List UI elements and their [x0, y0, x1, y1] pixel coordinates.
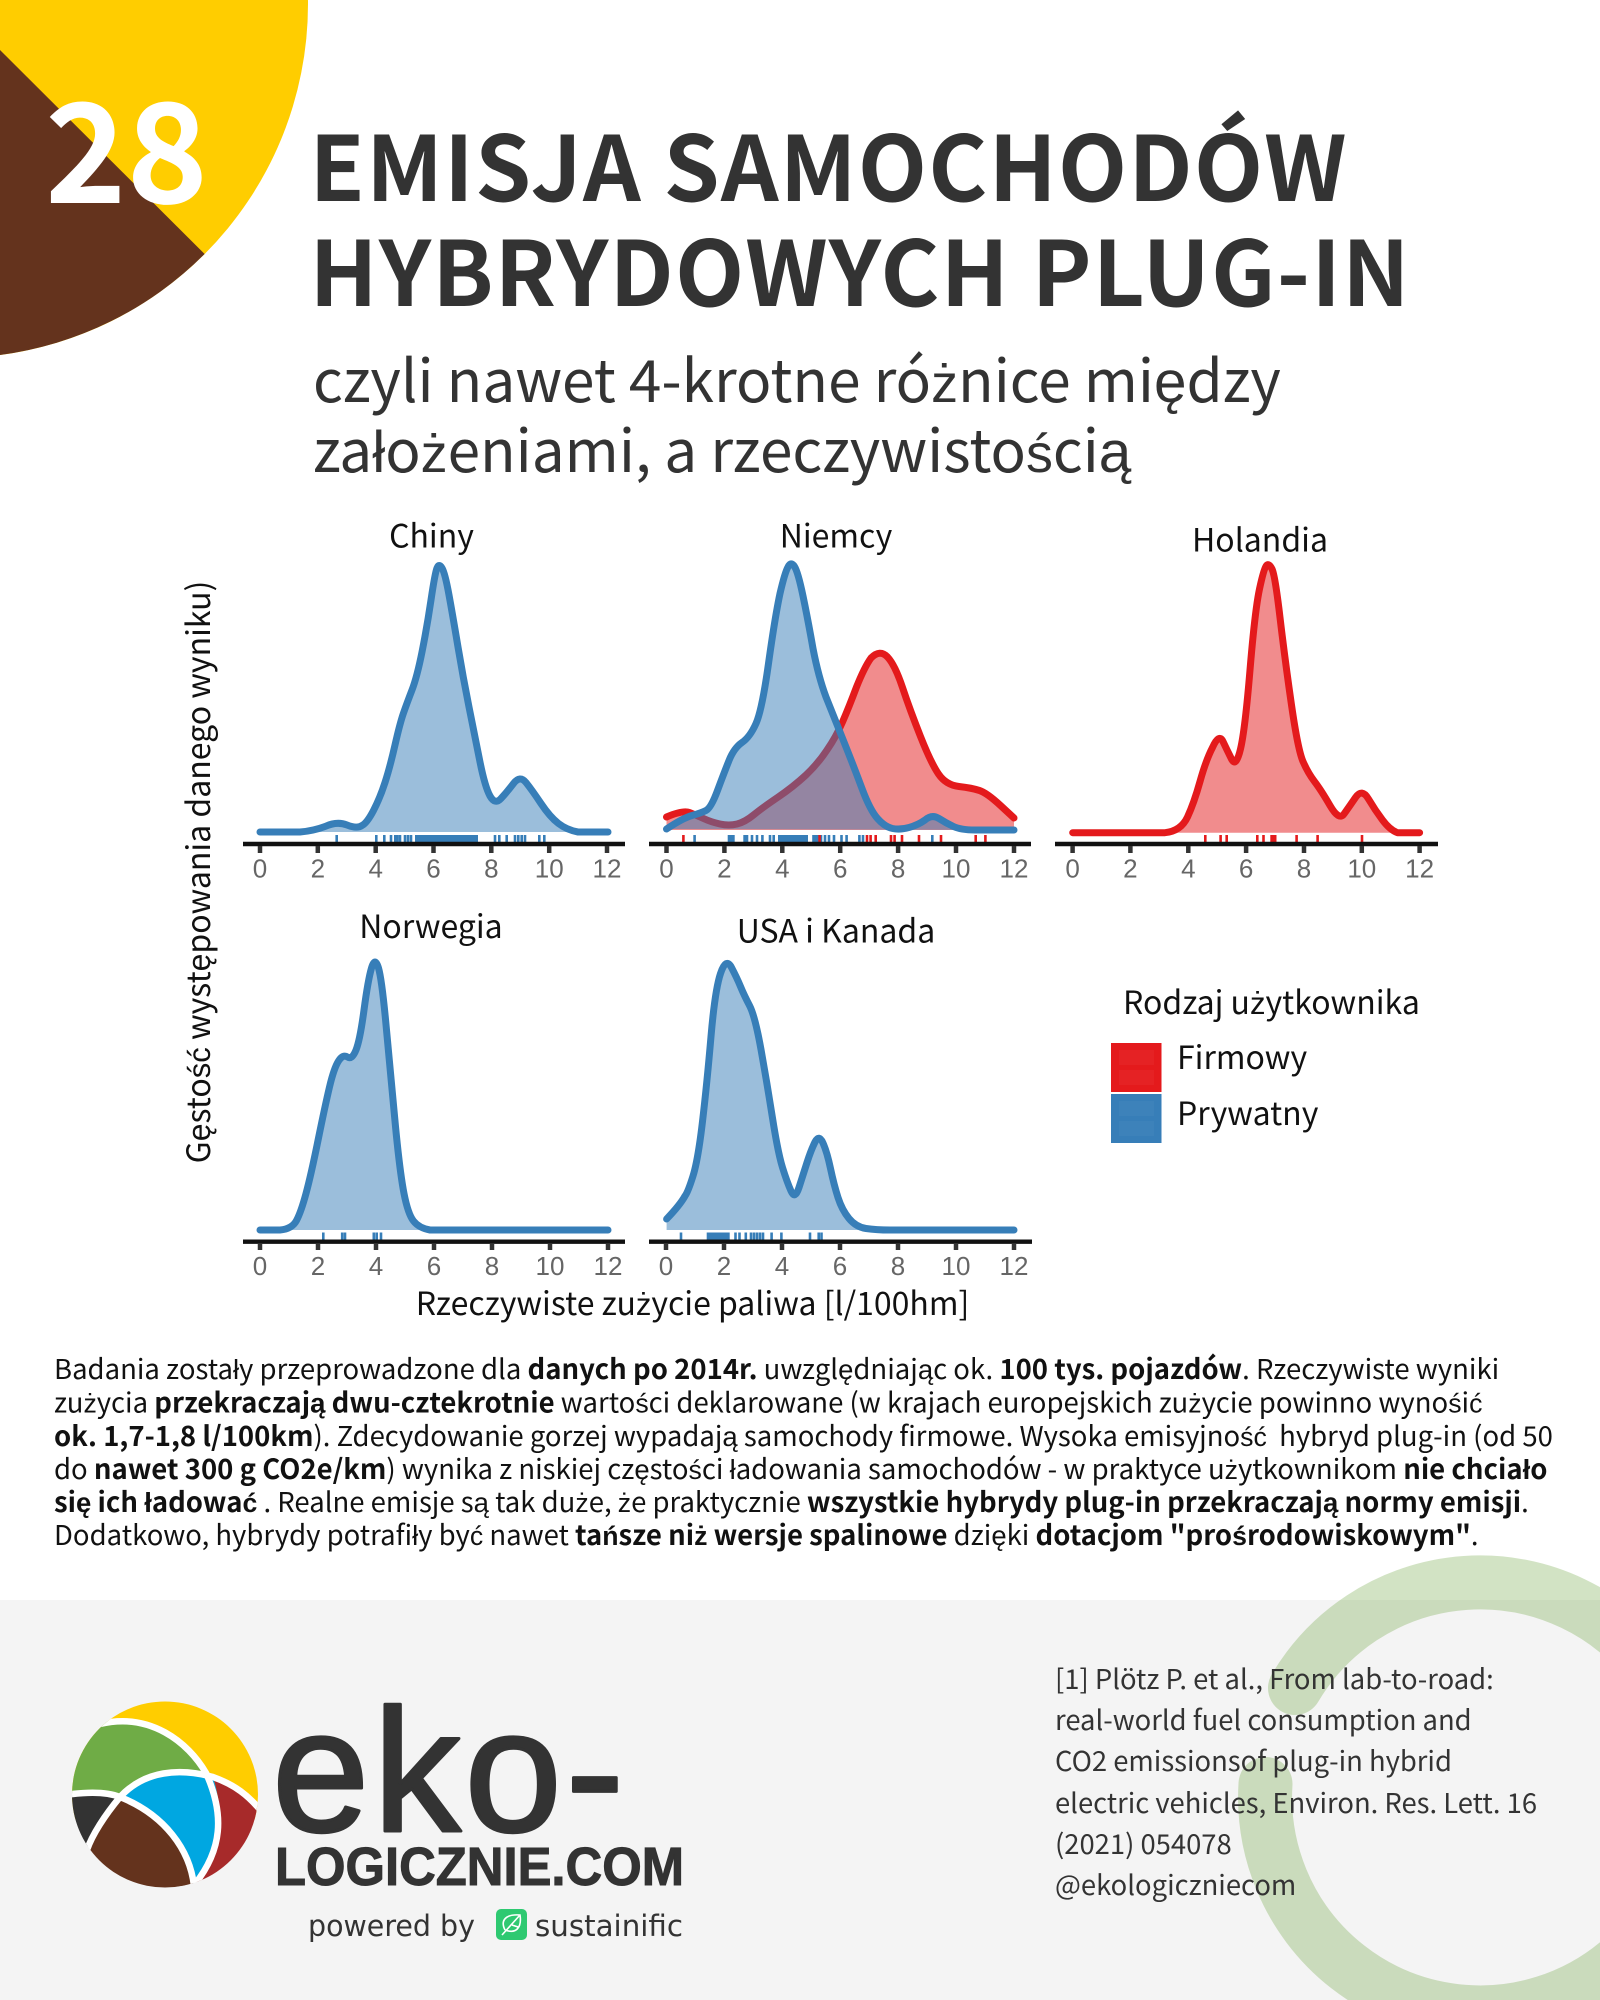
panel: Chiny: [243, 512, 625, 884]
x axis: 4: [775, 854, 790, 884]
x axis: 4: [369, 1251, 383, 1281]
legend swatch: firmowy: [1111, 1043, 1162, 1092]
citation: electric vehicles, Environ. Res. Lett. 16: [1055, 1781, 1537, 1821]
rug: [1205, 835, 1362, 843]
x axis: [649, 1242, 1032, 1281]
description text block: ok. 1,7-1,8 l/100km). Zdecydowanie gorzej wypadają samochody firmowe. Wysoka emisyjność hybryd plug-in (od 50: [54, 1414, 1553, 1454]
x axis: 12: [1000, 854, 1028, 884]
x axis: 4: [368, 854, 383, 884]
panel: USA i Kanada: [649, 906, 1032, 1281]
footer panel: [0, 1600, 1600, 2000]
heading: Niemcy: [780, 512, 893, 558]
panel: Norwegia: [243, 902, 625, 1281]
citation: (2021) 054078: [1055, 1822, 1232, 1862]
x axis: 6: [1239, 854, 1253, 884]
heading: Norwegia: [359, 902, 503, 948]
x axis: 6: [833, 1251, 847, 1281]
x axis: 0: [1065, 854, 1080, 884]
panel: Niemcy: [649, 512, 1031, 884]
density: prywatny: [667, 963, 1014, 1230]
density: prywatny: [260, 566, 608, 832]
citation: real-world fuel consumption and: [1055, 1698, 1472, 1738]
x axis: 10: [535, 854, 564, 884]
rug: [337, 835, 544, 843]
description text block: Badania zostały przeprowadzone dla danych po 2014r. uwzględniając ok. 100 tys. pojazdów. Rzeczywiste wyniki: [54, 1347, 1499, 1387]
x axis: [243, 844, 625, 884]
rug: [681, 1232, 822, 1240]
subtitle: założeniami, a rzeczywistością: [313, 404, 1132, 489]
description text block: zużycia przekraczają dwu-cztekrotnie wartości deklarowane (w krajach europejskich zużycie powinno wynośić: [54, 1380, 1482, 1420]
rug: [323, 1232, 381, 1240]
x axis: 6: [833, 854, 847, 884]
title: [310, 97, 1410, 332]
legend swatch: prywatny: [1111, 1094, 1162, 1143]
x axis: 4: [1181, 854, 1196, 884]
x axis: 2: [311, 854, 325, 884]
x axis: 2: [717, 1251, 731, 1281]
x axis: 10: [1347, 854, 1376, 884]
density: prywatny: [666, 564, 1014, 830]
subtitle: czyli nawet 4-krotne różnice między: [313, 334, 1281, 419]
x axis: 0: [659, 854, 674, 884]
description text block: [54, 1347, 1553, 1553]
legend label: prywatny: Prywatny: [1177, 1089, 1319, 1135]
x axis: 12: [593, 854, 621, 884]
density: prywatny: [260, 962, 608, 1230]
citation: @ekologiczniecom: [1055, 1863, 1296, 1903]
x axis: 4: [775, 1251, 789, 1281]
rug: [683, 835, 985, 843]
powered by sustainific: [308, 1909, 683, 1943]
x axis: 2: [311, 1251, 325, 1281]
x axis: 12: [1000, 1251, 1028, 1281]
x axis: 8: [485, 1251, 499, 1281]
issue number: 28: [45, 43, 208, 243]
x axis: 12: [594, 1251, 622, 1281]
description text block: się ich ładować . Realne emisje są tak duże, że praktycznie wszystkie hybrydy plug-in przekraczają normy emisji.: [54, 1480, 1529, 1520]
legend: [1111, 978, 1420, 1143]
density: firmowy: [1073, 565, 1420, 833]
x axis: 12: [1405, 854, 1434, 884]
logo wordmark: eko-: [272, 1674, 624, 1869]
panel: Holandia: [1055, 516, 1438, 884]
heading: Holandia: [1192, 516, 1328, 562]
title: HYBRYDOWYCH PLUG-IN: [310, 202, 1410, 332]
x axis: 8: [484, 854, 499, 884]
powered by sustainific: sustainific: [535, 1909, 683, 1943]
x axis: 0: [659, 1251, 673, 1281]
x axis: 10: [536, 1251, 564, 1281]
x axis: [649, 844, 1031, 884]
decorative ring: [1265, 1582, 1600, 2000]
x axis: 10: [942, 854, 970, 884]
icon: eko-logicznie globe logo: [72, 1702, 258, 1888]
x axis: 6: [427, 1251, 441, 1281]
logo wordmark: LOGICZNIE.COM: [275, 1837, 684, 1897]
legend label: firmowy: Firmowy: [1177, 1033, 1307, 1079]
description text block: do nawet 300 g CO2e/km) wynika z niskiej częstości ładowania samochodów - w praktyce użytkownikom nie chciało: [54, 1447, 1547, 1487]
icon: sustainific leaf: [496, 1909, 527, 1940]
title: EMISJA SAMOCHODÓW: [310, 97, 1346, 227]
legend title: Rodzaj użytkownika: [1123, 978, 1420, 1024]
x axis: 0: [253, 854, 267, 884]
x axis: 8: [1297, 854, 1311, 884]
x axis: [243, 1242, 625, 1281]
x axis: 8: [891, 854, 905, 884]
x axis title: Rzeczywiste zużycie paliwa [l/100hm]: [416, 1279, 969, 1325]
x axis: 2: [717, 854, 732, 884]
citation: CO2 emissionsof plug-in hybrid: [1055, 1739, 1452, 1779]
citation: [1] Plötz P. et al., From lab-to-road:: [1055, 1657, 1494, 1697]
x axis: 2: [1123, 854, 1138, 884]
heading: Chiny: [389, 512, 474, 558]
subtitle: [313, 334, 1281, 489]
description text block: Dodatkowo, hybrydy potrafiły być nawet tańsze niż wersje spalinowe dzięki dotacjom "prośrodowiskowym".: [54, 1513, 1479, 1553]
x axis: [1055, 844, 1438, 884]
corner badge: [0, 0, 308, 358]
y axis title: Gęstość występowania danego wyniku): [174, 581, 220, 1163]
heading: USA i Kanada: [737, 906, 935, 952]
citation: [1055, 1657, 1537, 1903]
x axis: 8: [891, 1251, 905, 1281]
powered by sustainific: powered by: [308, 1909, 475, 1943]
x axis: 10: [942, 1251, 970, 1281]
density: firmowy: [666, 653, 1014, 830]
x axis: 6: [426, 854, 441, 884]
x axis: 0: [253, 1251, 267, 1281]
